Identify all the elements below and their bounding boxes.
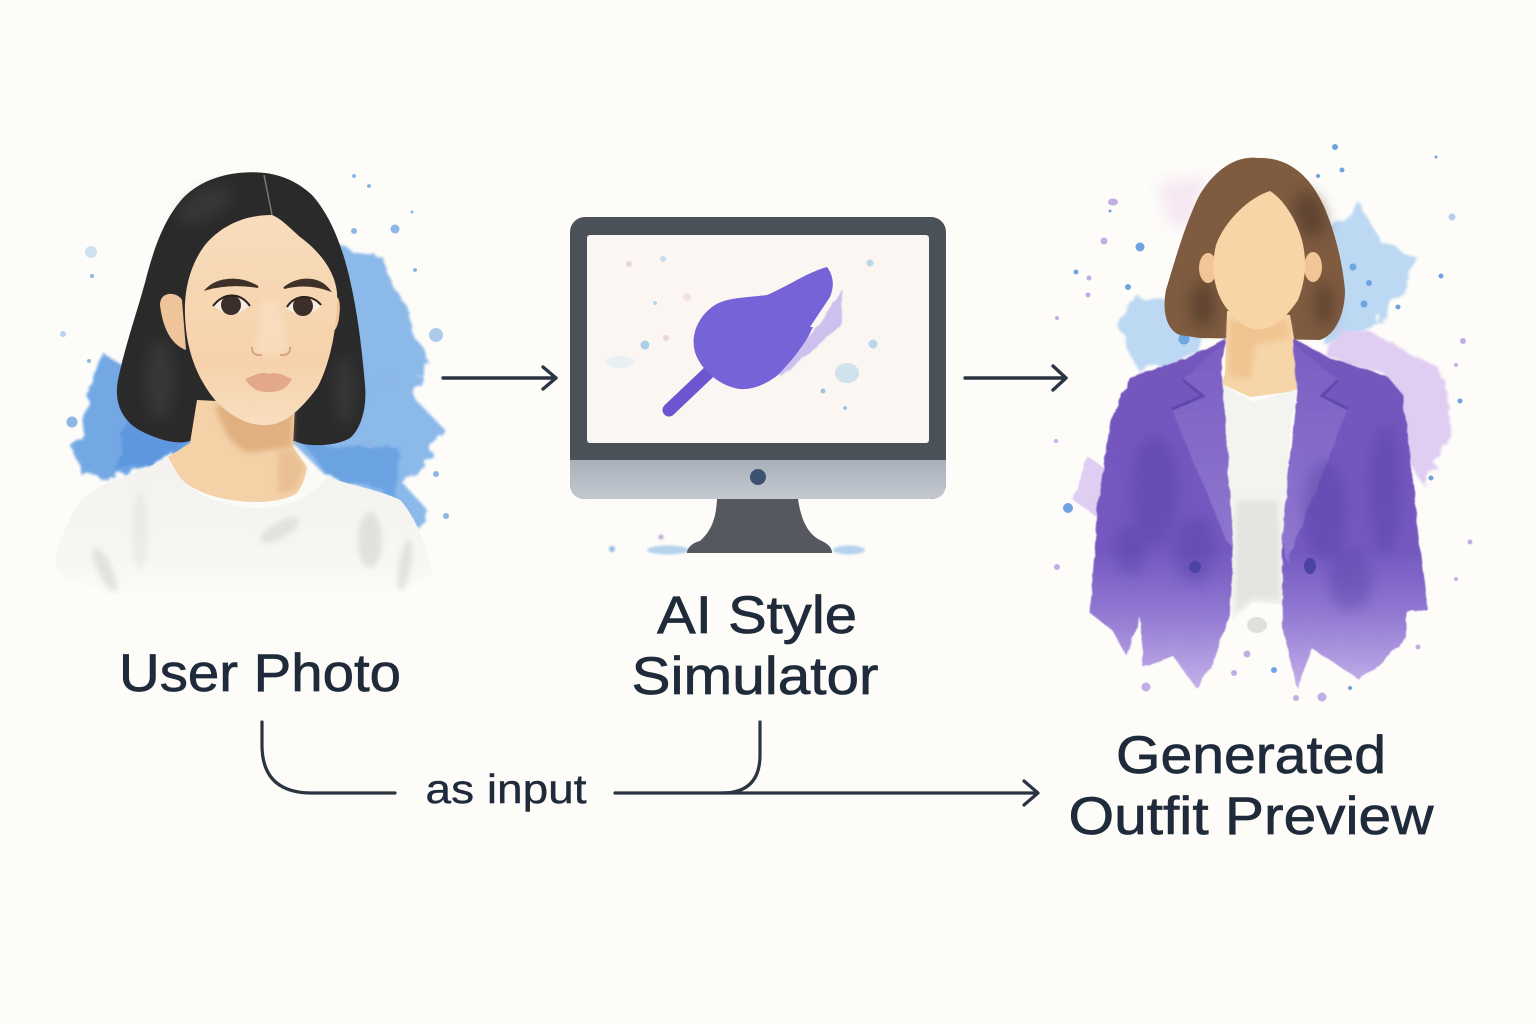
hair highlights (146, 178, 355, 425)
watercolor splashes (1054, 144, 1472, 702)
panel: monitor (570, 217, 946, 554)
arrow: simulator to preview (965, 366, 1066, 390)
connector: curved input lines and arrow (262, 722, 1038, 805)
panel: user photo portrait (56, 172, 449, 596)
label: AI style simulator: Simulator (632, 647, 878, 706)
label: AI style simulator: AI Style (657, 586, 857, 645)
screen speckles (606, 256, 878, 410)
hair (117, 172, 365, 445)
face (185, 215, 337, 425)
icon: purple paint brush (669, 267, 843, 410)
hair (1165, 158, 1345, 340)
jacket mottling (1114, 425, 1401, 610)
monitor chin (570, 460, 946, 499)
lips (245, 373, 292, 392)
lapel notches (1172, 380, 1348, 409)
hair shading (1191, 188, 1333, 329)
eyes (213, 295, 321, 316)
label: generated outfit preview (1068, 726, 1434, 846)
eyebrows (207, 280, 329, 290)
ears (160, 294, 340, 350)
shirt collar band (168, 457, 327, 508)
watercolor base splashes (609, 534, 865, 554)
jacket buttons (1189, 558, 1316, 574)
ears (1199, 252, 1322, 283)
panel: generated outfit figure (1054, 144, 1472, 702)
power button (750, 469, 766, 485)
label: user photo: User Photo (119, 644, 401, 703)
blank face (1213, 191, 1305, 329)
label: generated outfit preview: Outfit Preview (1068, 787, 1434, 846)
white top shading (1236, 500, 1280, 612)
hem pebble (1247, 617, 1267, 633)
label: generated outfit preview: Generated (1116, 726, 1386, 785)
monitor stand (687, 499, 832, 553)
label: AI style simulator (632, 586, 878, 706)
hair part (264, 175, 272, 215)
monitor frame (570, 217, 946, 499)
shirt (56, 457, 432, 596)
label: as input: as input (426, 766, 587, 812)
white top (1222, 384, 1297, 620)
neck (168, 400, 307, 502)
neck and chest (1222, 311, 1297, 397)
watercolor blue splash (60, 174, 449, 527)
arrow: photo to simulator (443, 367, 556, 389)
neck shadow (1228, 320, 1290, 380)
neck shadow (215, 405, 293, 453)
purple jacket (1090, 338, 1427, 689)
monitor screen (587, 235, 929, 443)
shirt folds (89, 490, 415, 595)
nose (252, 300, 290, 357)
